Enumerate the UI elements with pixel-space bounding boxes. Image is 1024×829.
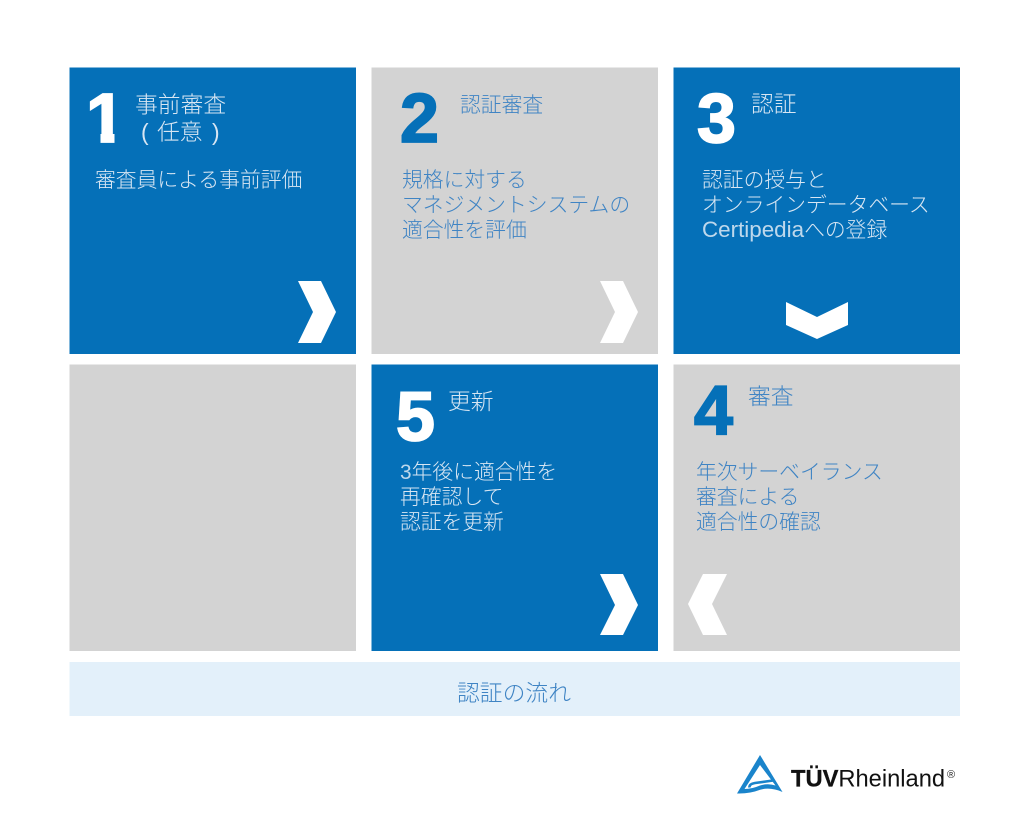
panel: empty grey [70, 364, 356, 651]
step 2 description [402, 169, 630, 242]
arrow: right [600, 281, 638, 343]
panel: step 4 [674, 364, 960, 651]
step 2 description: マネジメントシステムの [402, 194, 630, 217]
step 4 heading: 審査 [748, 384, 794, 410]
logo: TÜV Rheinland [737, 755, 955, 794]
step 5 description [400, 461, 557, 534]
step 3 description: 認証の授与と [702, 169, 827, 192]
step 5 description: 3年後に適合性を [400, 461, 557, 484]
step 1 heading: 任意 [157, 119, 203, 145]
step 3 description: Certipediaへの登録 [702, 217, 887, 242]
step 5 description: 認証を更新 [400, 511, 504, 534]
panel: step 2 [372, 68, 658, 354]
step 4 description [696, 461, 883, 534]
registered mark: ® [947, 769, 955, 781]
step 2 heading: 認証審査 [460, 94, 543, 117]
step 1 heading [135, 92, 226, 145]
step number 2: 2 [400, 79, 439, 157]
arrow: right [600, 574, 638, 635]
step 2 description: 適合性を評価 [402, 219, 527, 242]
panel: step 5 [372, 364, 658, 651]
caption text: 認証の流れ [457, 680, 571, 706]
step number 5: 5 [396, 378, 435, 456]
caption bar [70, 662, 960, 716]
arrow: down [786, 302, 848, 339]
step 3 heading: 認証 [751, 91, 797, 117]
step 2 description: 規格に対する [402, 169, 527, 192]
step number 1: 1 [86, 79, 125, 157]
icon: logo triangle [737, 755, 782, 794]
step 1 heading: ( [141, 119, 149, 145]
arrow: left [688, 574, 727, 635]
panel: step 3 [674, 68, 960, 354]
arrow: right [298, 281, 336, 343]
step 1 heading: ) [212, 119, 220, 145]
step number 4: 4 [694, 372, 733, 450]
step 4 description: 適合性の確認 [696, 511, 821, 534]
step 5 description: 再確認して [400, 486, 503, 509]
step 1 heading: 事前審査 [135, 92, 226, 118]
step 5 heading: 更新 [448, 388, 494, 414]
step 4 description: 審査による [696, 486, 799, 509]
step 1 description: 審査員による事前評価 [95, 169, 302, 192]
step 4 description: 年次サーベイランス [696, 461, 883, 484]
logo wordmark: TÜVRheinland [791, 766, 945, 792]
panel: step 1 [70, 68, 356, 354]
step 3 description: オンラインデータベース [702, 194, 930, 217]
step number 3: 3 [697, 79, 736, 157]
step 3 description [702, 169, 930, 242]
